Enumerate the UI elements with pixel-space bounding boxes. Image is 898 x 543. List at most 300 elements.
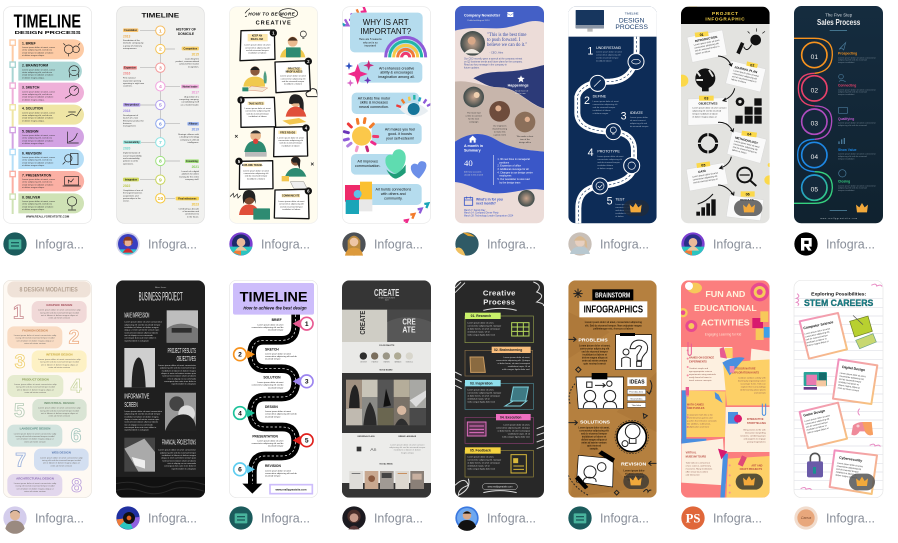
road stop icons [590,54,644,194]
note tabs: 02 [750,63,754,67]
note headings: ART AND [751,464,763,467]
number badges: 2 [307,59,310,64]
creator label: Infogra... [713,236,762,251]
note body text: consectetur adipiscing elit [245,110,270,113]
map pins: 6 [238,467,242,474]
lower headings: UNIVERSAL FLAGS [357,435,375,438]
avatar: woman in ring [116,232,140,256]
lower section [342,433,431,483]
subtitle: why art is so [363,40,378,44]
creator label: Infogra... [261,510,310,525]
big number 40: 40 [464,158,473,168]
card: Timeline design process road [568,7,657,223]
title: Creative [483,288,516,297]
title: PROJECT [712,11,739,16]
benefit text: Art builds connections [375,188,411,192]
step body text: Lorem ipsum dolor sit amet [593,100,619,103]
pill body: iscing elit sed do eiusmod tempor incidid [42,459,81,462]
step body text: eiusmod tempor [268,386,284,389]
step body text: incididunt labore [615,212,632,215]
left milestones: Foundation of the [123,39,141,42]
row 1, fourth pair of cards [676,0,883,256]
note body: age-appropriate science [689,370,713,373]
ideas list: First idea here [629,391,644,394]
note boxes [239,30,310,219]
icon: puzzle [345,182,372,214]
card border [229,7,318,223]
left milestones: and sustainability [123,157,140,160]
note headings: RESULTS [740,198,754,202]
card border [229,280,318,498]
box text: ut dolor lorem, sit amet consequat [498,362,530,365]
premium crown badge [623,474,649,489]
step text: 6. REVISION [22,151,42,155]
character illustrations [239,37,307,220]
section body text: aliqua ut enim ad minim veniam quis [161,372,196,375]
newsletter date: Published August 2024 [467,19,490,22]
paperclips and icons [686,342,766,467]
pill body: unt ut labore et dolore magna aliqua ut [41,314,78,317]
note body: museums. Many institutions [686,468,712,471]
step headings: Show Value [838,148,857,152]
numbered circles [156,26,165,203]
white header [568,7,657,37]
row 2, third pair of cards [455,280,657,531]
note body text: consectetur adipiscing elit [278,139,303,142]
career body: sed do eiusmod tempor [806,421,828,429]
note headings: INTRODUCTION [695,35,718,43]
step labels: 4 [588,147,594,159]
note body text: Lorem ipsum dolor sit amet [243,169,269,172]
photo captions: Our engineers [493,125,507,128]
step numbers: 02 [811,87,818,94]
note labels: TAKE NOTES [249,102,264,105]
box text: vestibulum turpis. Ut sit [467,465,490,468]
section body text: aliqua ut enim ad minim veniam quis [124,329,159,332]
creator label: Infogra... [826,236,875,251]
step text: et dolore magna aliqua. [22,98,45,101]
benefit text [355,66,415,200]
left milestones: expansion opening [123,80,142,82]
left milestones: 2016 [123,72,131,76]
creator label: Infogra... [487,236,536,251]
timeline rail [10,40,15,214]
box text: consectetur adipiscing elit. Quisque [496,426,531,429]
pill body: iscing elit sed do eiusmod tempor incidid [40,361,79,364]
note body: Conduct outdoor activity with [738,377,766,380]
header text: TIMELINE [625,12,639,16]
decorative flowers and puzzle [678,282,771,340]
card: Fun and educational activities [678,280,771,498]
title panel [7,281,91,297]
subtitle: How to achieve the best design [243,305,307,310]
ruled lines [794,299,883,489]
card border [117,7,204,223]
box text: Lorem ipsum dolor sit amet, [467,456,494,459]
step body text: Lorem ipsum dolor sit amet [597,155,624,158]
creator label: Infogra... [487,510,536,525]
right milestones: Competition [184,47,198,50]
creator label: Infogra... [374,236,423,251]
section body text: consequat duis aute irure dolor in [164,380,197,383]
pill body: Lorem ipsum dolor sit amet consectetur adip [38,407,81,410]
section text: Lorem ipsum dolor sit amet, [579,345,611,348]
creator label: Infogra... [35,510,84,525]
right milestones: 2019 [192,128,199,132]
career body: sed do eiusmod tempor [836,468,859,474]
footer pill: www.reallygreatsite.com [487,486,513,489]
note headings [695,35,759,202]
left milestones: social responsibility [123,154,142,157]
tan wave [455,81,544,152]
pill body: iscing elit sed do eiusmod tempor incidid [16,337,55,340]
creator label: Infogra... [713,510,762,525]
note headings: STORYTELLING [747,422,766,425]
left milestones: operations. [123,162,134,165]
photo captions: campaign [469,121,479,123]
avatar: teal landscape [455,232,479,256]
step headings: Qualifying [838,117,854,121]
step body text: sed do eiusmod tempor [615,209,638,212]
section body text: incididunt ut labore et dolore magna [124,326,159,329]
step text: 3. SKETCH [22,86,40,90]
left milestones: a group of visionary [123,44,143,47]
note body: Take kids on a virtual tour [686,462,710,465]
section text: quis nostrud [587,445,602,448]
photo captions: for the next [468,117,479,120]
icon: eye [396,95,431,117]
note body text: Lorem ipsum dolor sit amet [733,69,760,78]
step labels: DEFINE [593,95,607,99]
headers [465,313,531,454]
step text: 7. PRESENTATION [22,173,52,177]
card: Business project: BUSINESS PROJECT [139,289,183,303]
section text: adipiscing elit sed [624,475,645,478]
box text: ut dolor lorem, sit amet consequat [467,327,500,330]
career body: dolore magna aliqua ut [807,427,829,435]
card border [794,280,883,498]
papers [576,335,652,487]
pill body: enim ad minim veniam [24,491,46,493]
right milestones: intelligence. [188,141,199,144]
note labels: FREE READS [280,131,296,134]
summary list: employees [499,175,512,178]
step text: smod tempor incididunt ut labore [22,74,54,77]
dark city wave [473,65,544,108]
section text: consectetur adipiscing elit [579,430,609,433]
right milestones: Alliance [189,123,198,126]
section text: sample. [590,449,599,451]
card: Timeline road [229,280,318,498]
photo circles [463,87,535,132]
note body: puzzles that enhance concepts [687,420,717,423]
section headings [578,337,647,468]
pill body: enim ad minim veniam [49,367,70,369]
left milestones: Completion of one of [123,189,143,192]
road [252,315,296,485]
career headings: Computer Science [803,320,834,330]
subtitle: Design Process: DESIGN PROCESS [15,30,82,36]
headers: 04. Execution [500,415,521,419]
card: Business project: OBJECTIVES [177,354,196,363]
card border [3,7,92,223]
big outlined numerals: 5 [14,401,25,422]
benefit text: Art builds fine motor [358,96,391,100]
benefit text: your self-esteem! [386,136,414,140]
pill headings: WEB DESIGN [52,451,71,455]
ideas list: Second idea [630,398,643,400]
numbered circles: 6 [159,121,162,127]
yellow edge blobs [676,0,774,185]
box text: Lorem ipsum dolor sit amet, [503,356,530,359]
step text: ctetur adipiscing elit, sed do eiu [22,93,53,96]
title: Timeline: TIMELINE [14,10,81,31]
heading: History of Domicile: DOMICILE [178,32,195,36]
map pins: 3 [305,379,309,386]
left milestones: partnerships in the [123,197,142,200]
step body text: consectetur adipiscing elit sed do [265,413,298,416]
section headings: INFORMATIVE [124,392,149,401]
section body text: nisi ut aliquip ex ea commodo [168,462,197,465]
box text: nulla congue ligula dolor sed. [502,435,530,438]
right milestones: commitment to [185,213,200,216]
step rings [802,42,827,200]
row 2, left pair of cards [3,280,206,534]
icon: sparkles [345,60,374,87]
quote: to push forward. I [487,38,521,43]
avatar: dark portrait [342,506,366,530]
title: ACTIVITIES [701,317,750,327]
section text: do eiusmod [627,479,641,481]
note labels: COMMUNICATE [282,195,300,198]
career body: Lorem ipsum dolor sit amet [804,327,831,336]
step labels: 3 [621,110,627,122]
pill body: Lorem ipsum dolor sit amet consectetur adip [38,309,81,312]
step body text: consectetur adipiscing [615,206,637,209]
section body text: incididunt ut labore et dolore magna [162,454,197,457]
section text: incididunt ut labore et [583,354,607,357]
paper mottling [568,312,657,498]
pill body: unt ut labore et dolore magna aliqua ut [41,363,78,366]
note body: explore their surroundings [741,386,766,389]
note labels: IDEAS JAR [251,38,264,41]
footer url: www.reallygreatsite.com [820,217,857,220]
step headings: SOLUTION [263,376,281,380]
note body text: et dolore magna aliqua ut [692,116,717,119]
step body text: incididunt labore [597,164,614,167]
title: FUN AND [705,289,745,299]
step text: Lorem ipsum dolor sit amet, conse [22,111,56,114]
headers: 02. Brainstorming [494,348,522,352]
card: 8 design modalities [3,280,92,498]
website box [270,485,312,494]
note body text: consectetur adipiscing elit [732,72,758,81]
number caption: closed in this month [464,174,484,177]
note labels: EXPLORE TRAVEL [242,164,263,167]
step body text: et dolore magna [593,112,609,115]
sample marks: An [370,447,377,453]
numbered circles: 1 [159,28,162,34]
header text: DESIGN [619,17,645,24]
footer rule [830,209,847,211]
step body text: Lorem ipsum dolor sit amet [596,51,622,54]
pill body: iscing elit sed do eiusmod tempor incidid [16,435,55,438]
note headings: HANDS-ON SCIENCE [689,357,714,360]
bulb circle [615,420,648,454]
lower headings [357,435,417,438]
career body: incididunt ut labore et [836,471,857,476]
note body: Conduct simple and [689,367,709,370]
title: TIMELINE [141,12,180,19]
connecting arrows [718,56,735,195]
pill body: Lorem ipsum dolor sit amet consectetur adip [40,456,83,459]
note body: like addition, subtraction, [687,423,711,426]
calendar icon [464,197,473,205]
section body text: Lorem ipsum dolor sit amet consectetur [158,449,196,452]
top wave [455,6,544,31]
row 1, second pair of cards [229,6,431,256]
palette section [342,342,431,373]
step text: 1. BRIEF [22,41,36,45]
note body text: Lorem ipsum dolor sit amet [734,140,760,149]
pill headings: ARCHITECTURAL DESIGN [16,476,54,480]
step body text: eiusmod tempor [265,475,281,478]
website box: www.reallygreatsite.com [275,487,307,491]
career body: incididunt ut labore et [838,381,859,386]
map pins: 4 [238,410,242,417]
note headings: CRAFT PROJECTS [740,468,763,471]
note headings: METHODOLOGY [735,136,759,145]
step headings: BRIEF [272,318,282,322]
step body text: tempor incididunt [838,189,855,192]
photo captions: to make this [494,131,505,134]
title doodles [245,9,298,18]
section headings: SCREEN [124,400,138,409]
career body: consectetur adipiscing elit [805,330,830,339]
avatar: R logo [794,232,818,256]
note body text: consectetur adipiscing elit [693,175,718,182]
card border [3,280,92,498]
summary list: 3. Additional coverage for all [497,168,529,171]
note tabs: 01 [700,33,704,37]
creator label: Infogra... [600,510,649,525]
note body: and animals [754,393,766,395]
career headings [803,320,865,463]
right milestones: Launch of a digital [181,170,200,173]
S curve connectors [794,38,832,203]
icon: gear and squares [735,97,762,124]
box text: vestibulum turpis. Ut sit [508,432,530,435]
title: IMPORTANT? [360,27,412,36]
benefit text: communication. [355,164,380,168]
step text: ctetur adipiscing elit, sed do eiu [22,114,53,117]
step body text: consectetur adipiscing elit sed do [265,355,298,358]
career body: consectetur adipiscing elit [805,417,830,426]
big outlined numerals: 4 [71,377,82,398]
left milestones: entrepreneurs. [123,47,137,50]
footer url: WWW.REALLYGREATSITE.COM [26,216,69,219]
note body: offer virtual tours online [686,471,709,474]
photo captions: shared learning [492,128,508,131]
section text: consectetur adipiscing elit [580,348,610,351]
pill body: Lorem ipsum dolor sit amet consectetur adip [14,383,57,386]
step text: ctetur adipiscing elit, sed do eiu [22,203,53,206]
right milestones [176,47,200,218]
section text [578,345,645,481]
step body text: adipiscing elit sed do eiusmod [838,124,868,127]
note body: and interactive [686,474,700,477]
ideas list [627,389,646,407]
step body text: Lorem ipsum dolor sit amet [265,410,291,413]
note body: learning by organizing nature [738,380,766,383]
section text: sed do eiusmod tempor [582,351,608,354]
step text: et dolore magna aliqua. [22,164,45,167]
step body text: eiusmod tempor [268,329,284,332]
swatch captions: #9A9686 [383,360,390,363]
note tabs: 04 [747,132,752,136]
step text: et dolore magna aliqua. [22,208,45,211]
step text: et dolore magna aliqua. [22,119,45,122]
footer pill [482,484,517,490]
icon: pen and bulb [736,28,765,54]
intro text: pellentesque nisi, rhoncus ut labore [593,328,634,331]
career body: Lorem ipsum dolor sit amet [804,414,831,423]
title: 8 DESIGN MODALITIES [19,287,78,293]
title: Infographics: INFOGRAPHICS [584,305,643,316]
summary list: positions [499,161,510,164]
note body: experiments using materials [689,373,716,376]
row 1, left pair of cards [3,7,204,256]
step body text: Lorem ipsum dolor [630,116,648,119]
right milestones: 2021 [192,165,199,169]
avatar: blonde woman [568,232,592,256]
step text: Lorem ipsum dolor sit amet, conse [22,46,56,49]
social thumbnails [349,471,424,489]
note body text: incididunt ut labore [248,52,267,55]
number badges: 6 [307,189,310,194]
step body text: eiusmod tempor [265,415,281,418]
step labels: IDEATE [630,111,643,115]
photo grid [346,380,426,425]
note labels: KEEP AN [252,35,262,38]
note body text: consectetur adipiscing elit [245,46,270,49]
step text: ctetur adipiscing elit, sed do eiu [22,181,53,184]
career body: dolore magna aliqua ut [835,474,858,480]
numbered circles: 3 [159,65,162,71]
section body text: consequat duis aute irure dolor in [124,426,157,429]
step headings: DESIGN [265,405,278,409]
note headings: JOURNAL PLAN [734,65,758,74]
note body text: Lorem ipsum dolor sit amet [244,44,271,47]
happenings text: what's new [515,92,526,95]
step text: smod tempor incididunt ut labore [22,139,54,142]
title: HOW TO BE MORE [248,12,296,17]
section body text [124,321,197,470]
note body text: Lorem ipsum dolor sit amet [280,75,306,78]
note body text: sed do eiusmod tempor [279,142,302,145]
section text: dolore magna aliqua ut [581,439,607,442]
note holes [687,349,731,494]
section body text: reprehenderit in voluptate [124,339,150,342]
subtitle: Sales Process: Sales Process [817,18,861,27]
title: Process [483,298,515,307]
right milestones: E-learning [186,161,198,163]
quote photo [460,31,485,56]
sketch: heads and arrow [583,381,617,408]
note body text: consectetur adipiscing elit [733,143,758,152]
benefit text: Art improves [357,160,378,164]
big outlined numerals: 3 [15,352,26,373]
